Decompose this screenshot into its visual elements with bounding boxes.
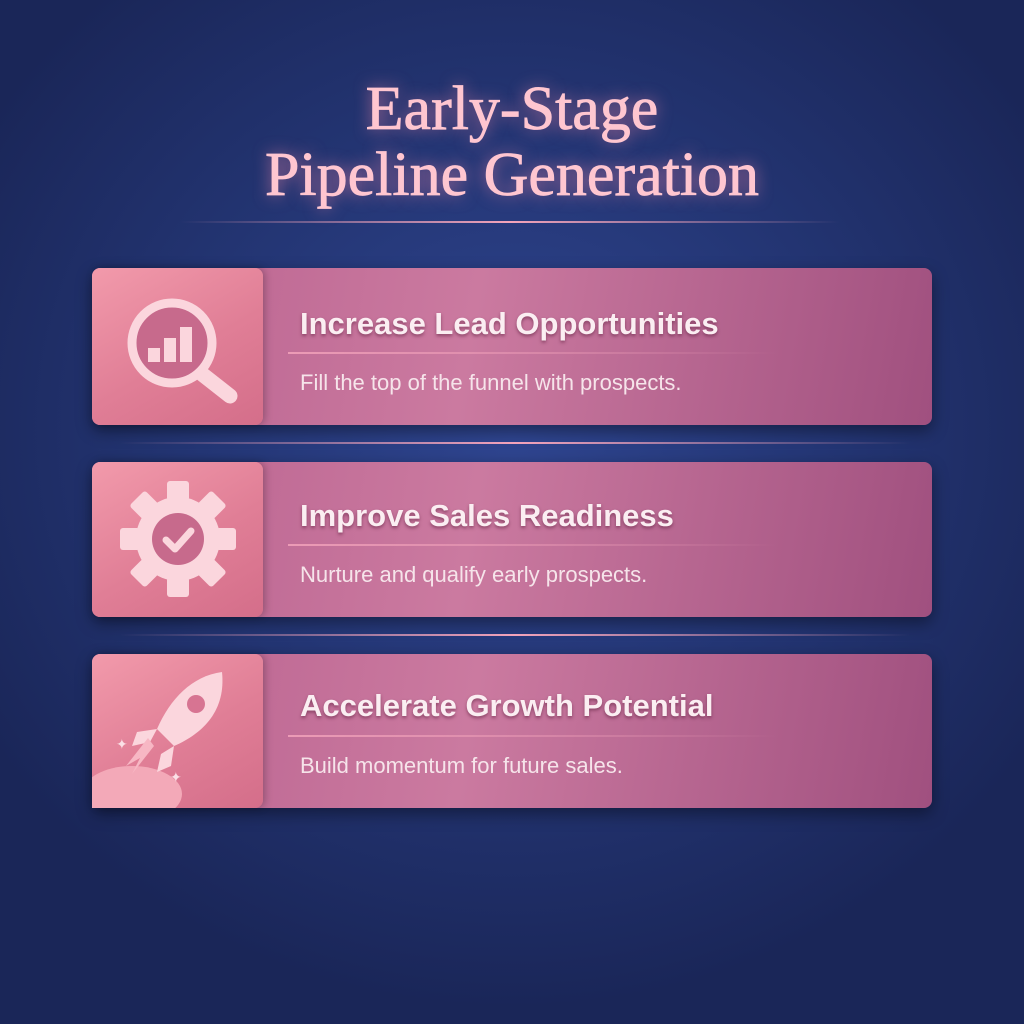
- title: Early-Stage: [366, 75, 658, 143]
- icon: rocket: [92, 654, 263, 808]
- icon: gear with check: [92, 462, 263, 617]
- heading: Improve Sales Readiness: [300, 498, 674, 533]
- description: Fill the top of the funnel with prospects.: [300, 370, 682, 395]
- title glow divider: [180, 221, 840, 223]
- icon: rocket: ✦: [170, 769, 182, 785]
- heading: Accelerate Growth Potential: [300, 688, 713, 723]
- title: Pipeline Generation: [265, 141, 759, 209]
- icon: magnifier with bars: [92, 268, 263, 425]
- heading: Increase Lead Opportunities: [300, 306, 719, 341]
- card 3: accelerate growth potential: [92, 654, 932, 808]
- description: Build momentum for future sales.: [300, 753, 623, 778]
- title: [260, 75, 766, 216]
- description: Nurture and qualify early prospects.: [300, 562, 647, 587]
- card 2: improve sales readiness: [92, 462, 932, 617]
- card 1: increase lead opportunities: [92, 268, 932, 425]
- icon: rocket: ✦: [116, 736, 128, 752]
